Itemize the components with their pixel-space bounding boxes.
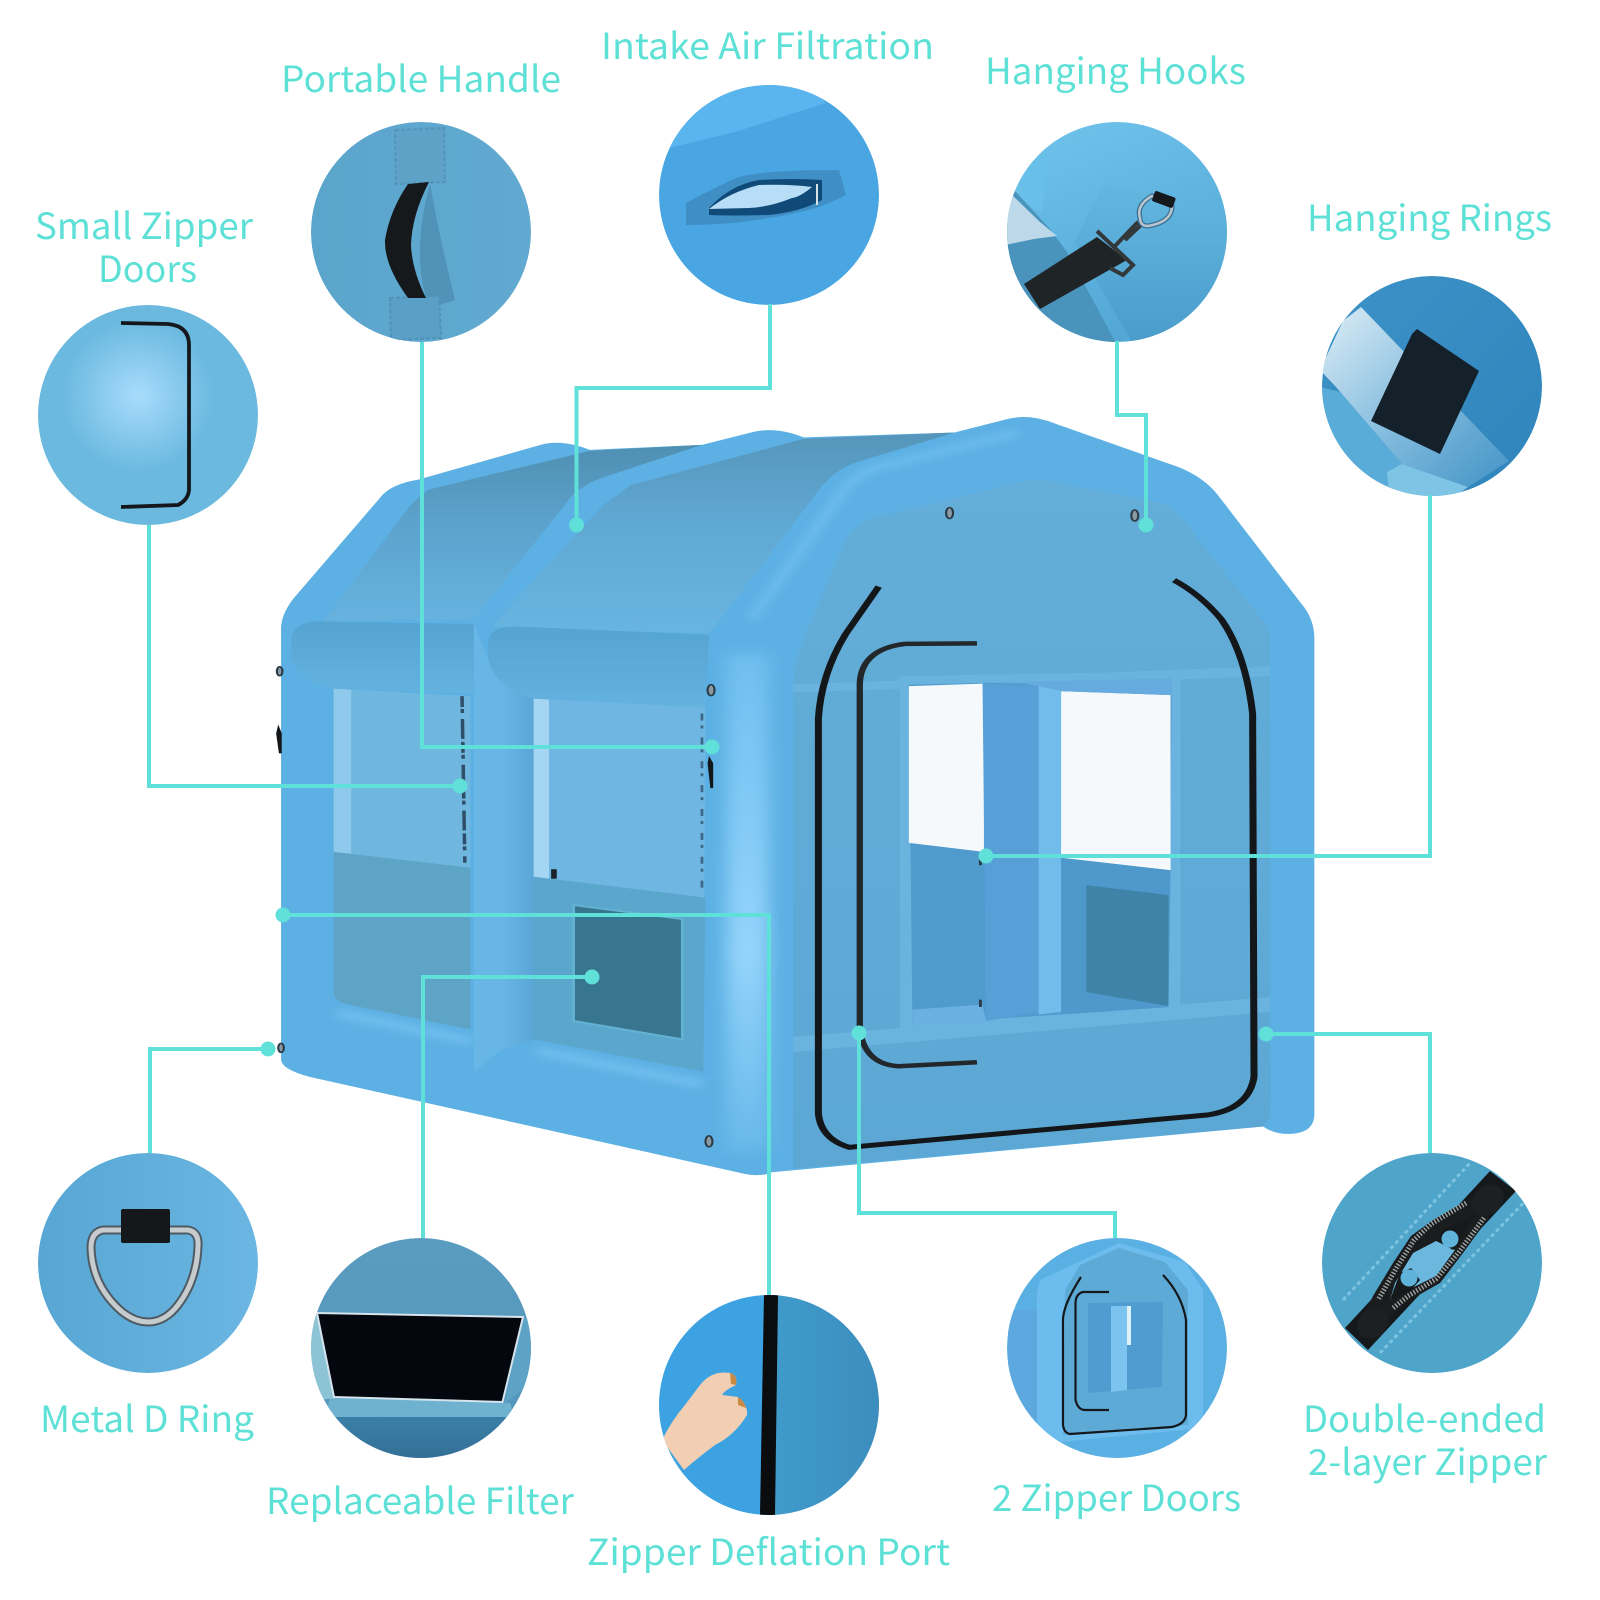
front pillar highlight [726,654,769,1151]
leader line [150,1049,268,1153]
icon: mini tent front [1007,1238,1227,1458]
callout: Small Zipper Doors [35,198,468,794]
leader line [422,342,712,747]
dot [1258,1026,1274,1042]
dot [569,518,584,532]
icon: air intake slit [659,80,879,305]
label: Intake Air Filtration [601,18,934,70]
leader line [1117,341,1146,525]
window lower band [793,997,1270,1052]
callout: Portable Handle [281,51,720,754]
front eave tube [488,626,709,708]
leader line [149,525,460,786]
label: Doors [98,241,197,293]
leader line [859,1033,1115,1238]
leader line [423,977,592,1238]
dot [584,970,600,984]
label [1303,1391,1548,1486]
label: Small Zipper [35,198,254,250]
dot [852,1026,866,1040]
label: Double-ended [1303,1391,1546,1443]
label [35,198,254,293]
dot [276,908,290,922]
callout: Intake Air Filtration [569,18,934,532]
dot [704,740,720,754]
bottom rail highlight [337,1013,702,1084]
callout: Hanging Rings [978,190,1552,864]
label: Hanging Rings [1307,190,1552,242]
replaceable filter panel [574,905,682,1039]
callout: 2 Zipper Doors [852,1026,1241,1522]
leader line [576,304,770,525]
icon: hook and strap [1000,122,1230,345]
icon: D ring [38,1153,258,1373]
callout: Zipper Deflation Port [276,908,950,1576]
front roof panel [491,432,954,634]
label: 2 Zipper Doors [992,1470,1241,1522]
icon: double zipper [1322,1153,1542,1373]
leader line [283,915,769,1295]
leader line [1266,1034,1430,1153]
label: Portable Handle [281,51,561,103]
dot [452,778,468,794]
callout: Hanging Hooks [985,43,1246,532]
label: 2-layer Zipper [1308,1434,1548,1486]
callout: Replaceable Filter [266,970,600,1525]
front door face [793,480,1270,1169]
label: Hanging Hooks [985,43,1246,95]
outer door zipper [818,580,1254,1147]
dot [978,848,994,864]
label: Metal D Ring [40,1391,254,1443]
rear side window [334,689,470,1029]
inner door zipper [860,643,977,1066]
icon: black patch [1320,276,1542,500]
icon: zipper on tube [38,305,258,525]
rear eave tube [292,621,474,694]
dot [1138,518,1154,532]
dot [260,1042,276,1056]
label: Replaceable Filter [266,1473,575,1525]
inflatable tent illustration [276,417,1314,1175]
tent silhouette [281,417,1314,1175]
grommets and side zippers [276,508,1138,1147]
icon: strap handle [311,122,531,342]
arch highlight [751,432,1018,619]
callout: Double-ended 2-layer Zipper [1258,1026,1548,1486]
callout: Metal D Ring [38,1042,276,1443]
rear roof panel [323,445,702,621]
label: Zipper Deflation Port [587,1524,950,1576]
front side window [534,699,705,1072]
leader line [986,495,1430,856]
window upper band [793,666,1270,693]
icon: hand opening zipper [655,1290,885,1520]
middle pillar [474,624,534,1072]
front window opening [900,671,1180,1034]
icon: filter panel [310,1238,535,1460]
